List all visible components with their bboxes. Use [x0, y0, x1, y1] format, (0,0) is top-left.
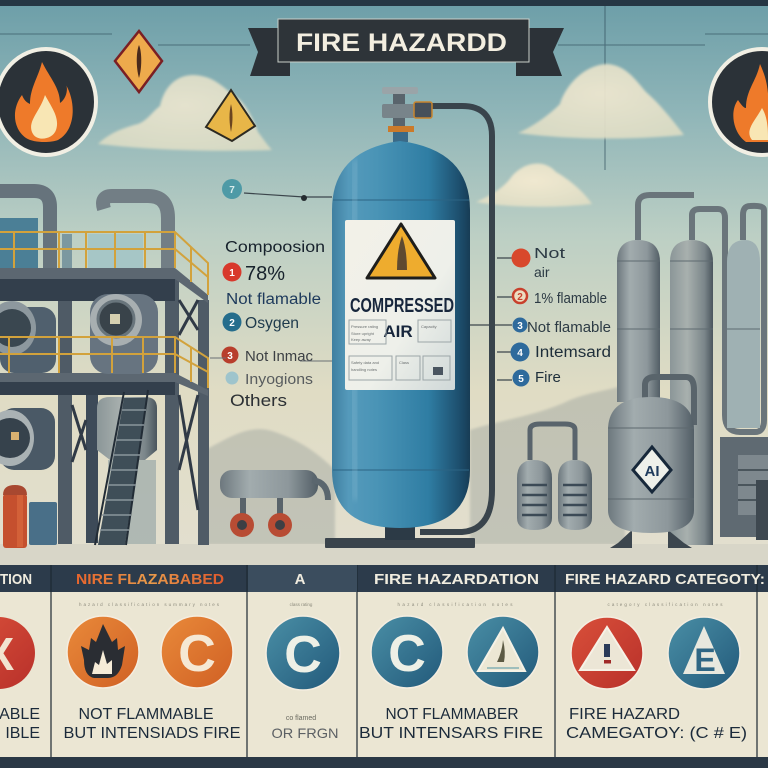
table column dividers [51, 565, 757, 757]
cell: flammable column: BUT INTENSIADS FIRE [64, 725, 240, 742]
title banner [248, 19, 564, 76]
fire extinguisher [3, 485, 27, 548]
item not air: air [534, 264, 550, 280]
sky background [0, 0, 768, 560]
item intemsard: Intemsard [535, 344, 611, 361]
label small print: Keep away [351, 337, 371, 342]
cylinder seam [333, 200, 469, 470]
cell: category column: category classification notes [608, 602, 723, 607]
lower silver tank [97, 397, 157, 460]
top marker and leader line [222, 179, 332, 201]
blue barrel [29, 502, 57, 545]
cell: first partial column [0, 571, 40, 742]
railings [0, 232, 208, 388]
cell: category column: FIRE HAZARD [569, 706, 680, 723]
cylinder label [345, 220, 455, 390]
item not inmac: Not Inmac [245, 348, 313, 365]
table panel background [0, 592, 768, 757]
icon: blue C second: C [388, 625, 426, 683]
cell: A column: co flamed [286, 715, 316, 722]
cell: flammable column [64, 571, 240, 742]
AI diamond badge [633, 447, 671, 492]
icon: blue E circle [668, 617, 740, 689]
cylinder A [617, 240, 660, 402]
cell: flammable column: NIRE FLAZABABED [76, 571, 224, 588]
others: Others [230, 392, 287, 410]
label mini bars [433, 367, 443, 375]
centre compressor unit [220, 470, 328, 537]
item oxygen: Osygen [245, 315, 299, 332]
valve [382, 87, 432, 142]
item not air: Not [534, 245, 566, 262]
cell: fire hazard column: hazard classification notes [398, 602, 513, 607]
not flammable line: Not flamable [226, 291, 321, 308]
background lines [0, 6, 768, 170]
cylinder B [670, 240, 713, 545]
storage blocks behind railing [0, 218, 143, 268]
item 78 percent: 78% [245, 263, 285, 285]
item oxygen: 2 [229, 318, 235, 329]
icon: blue C second [371, 616, 443, 688]
stand [325, 522, 475, 548]
right machine cabinet [720, 437, 768, 540]
cylinder pipes [638, 195, 764, 432]
icon: diamond warning sign [115, 31, 162, 92]
cylinder body [332, 141, 470, 528]
label small print: Capacity [421, 324, 437, 329]
cylinder highlight [352, 160, 357, 500]
icon: blue E circle: E [694, 642, 716, 678]
clouds [98, 64, 684, 207]
cell: A column: A [295, 571, 306, 588]
item oxygen [222, 312, 299, 332]
right tall cylinders [617, 195, 764, 545]
item not flamable: Not flamable [527, 319, 611, 336]
label small print: Store upright [351, 331, 375, 336]
item flammable: 1% flamable [534, 291, 607, 307]
small twin tanks [517, 424, 592, 530]
label small print: Pressure rating [351, 324, 378, 329]
table header band [0, 565, 768, 592]
item not inmac [210, 346, 332, 365]
label small print: Class [399, 360, 409, 365]
column frame [58, 279, 209, 545]
label name: COMPRESSED [350, 295, 454, 317]
cell: A column [248, 565, 357, 741]
lower tank column [108, 460, 156, 544]
icon: triangle warning sign [206, 90, 255, 141]
main compressed air cylinder [325, 87, 492, 548]
distant mountains [205, 385, 625, 545]
item invogions: Inyogions [245, 371, 313, 388]
icon: blue C: C [284, 626, 322, 684]
label data boxes [349, 320, 451, 380]
item 78 percent [222, 262, 285, 285]
icon: orange C: C [178, 625, 216, 683]
label small print: handling notes [351, 367, 377, 372]
label air: AIR [383, 322, 413, 341]
icon: flame circle [67, 616, 139, 688]
top marker and leader line: 7 [229, 185, 235, 196]
left composition list [210, 179, 332, 410]
cell: flammable column: NOT FLAMMABLE [78, 706, 214, 723]
cell: first partial column: TION [0, 571, 32, 588]
item fire: Fire [535, 369, 561, 386]
staircase [95, 390, 148, 545]
item flammable [513, 289, 607, 307]
item fire [512, 369, 561, 386]
cell: first partial column: IBLE [5, 725, 40, 742]
icon: blue C [266, 616, 340, 690]
ground strip [0, 544, 768, 566]
item not flamable: 3 [517, 321, 523, 332]
icon: triangle circle [467, 616, 539, 688]
icon: left flame badge [0, 49, 96, 155]
icon: right flame badge [710, 49, 768, 155]
cell: A column: class rating [290, 602, 313, 607]
title text: FIRE HAZARDD [296, 29, 507, 57]
item not inmac: 3 [227, 351, 233, 362]
AI diamond badge: AI [644, 463, 660, 480]
icon: red warning circle [571, 617, 643, 689]
item not air [512, 245, 566, 280]
item 78 percent: 1 [229, 268, 235, 279]
item flammable: 2 [517, 292, 523, 303]
cell: fire hazard column [359, 571, 543, 742]
cylinder C [727, 240, 760, 428]
top bar [0, 0, 768, 6]
cell: category column: FIRE HAZARD CATEGOTY: [565, 571, 765, 588]
table bottom band [0, 757, 768, 768]
right property list [470, 245, 611, 386]
cell: fire hazard column: FIRE HAZARDATION [374, 571, 539, 588]
label small print: Safety data and [351, 360, 379, 365]
left industrial platform [0, 191, 209, 548]
item intemsard [510, 342, 611, 362]
fan unit upper middle [90, 294, 158, 374]
cross braces [72, 300, 198, 510]
cell: fire hazard column: BUT INTENSARS FIRE [359, 725, 543, 742]
right large tank [608, 377, 694, 548]
icon: orange C [161, 616, 233, 688]
pipes behind platform [0, 191, 168, 268]
cell: fire hazard column: NOT FLAMMABER [386, 706, 518, 723]
cell: A column: OR FRGN [272, 725, 338, 741]
cell: flammable column: hazard classification summary notes [79, 602, 220, 607]
hazard table [0, 565, 768, 768]
composition heading: Compoosion [225, 239, 325, 256]
cell: first partial column: ABLE [0, 706, 40, 723]
top deck [0, 268, 208, 303]
item fire: 5 [518, 374, 524, 385]
fan unit lower left [0, 408, 55, 470]
red wheels [230, 513, 292, 537]
hose [420, 106, 492, 532]
second deck [0, 373, 208, 396]
warning triangle [367, 224, 435, 278]
cell: category column [565, 571, 765, 742]
label small print [351, 324, 437, 372]
fan unit upper left [0, 301, 56, 373]
item intemsard: 4 [517, 348, 523, 359]
cell: category column: CAMEGATOY: (C # E) [566, 725, 747, 742]
